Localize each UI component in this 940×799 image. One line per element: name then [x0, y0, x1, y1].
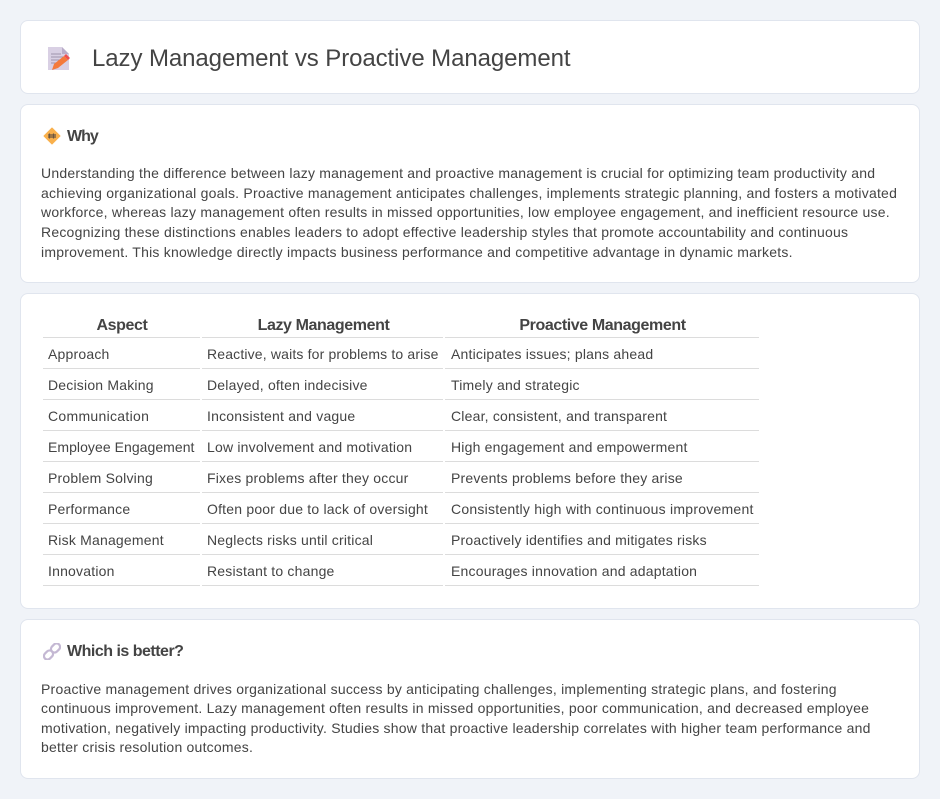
icon: warning diamond: [44, 128, 60, 144]
row: approach: Approach: [48, 346, 110, 362]
icon: link: [43, 643, 61, 660]
text block: why paragraph: Recognizing these distinctions enables leaders to adopt effective leadership styles that promote accountability and continuous: [41, 224, 848, 240]
row: risk management: Proactively identifies and mitigates risks: [451, 532, 707, 548]
panel: why: [20, 104, 920, 283]
text block: why paragraph: workforce, whereas lazy management often results in missed opportunities, low employee engagement, and inefficient resource use.: [41, 204, 890, 220]
heading: which is better: Which is better?: [67, 643, 183, 660]
icon: memo with pencil: [48, 47, 70, 70]
row: performance: Consistently high with continuous improvement: [451, 501, 754, 517]
heading: why: Why: [67, 128, 98, 145]
row: performance: [48, 501, 754, 517]
row: problem solving: Fixes problems after they occur: [207, 470, 408, 486]
row: communication: [48, 408, 667, 424]
row: approach: Reactive, waits for problems to arise: [207, 346, 439, 362]
text block: why paragraph: improvement. This knowledge directly impacts business performance and competitive advantage in dynamic markets.: [41, 244, 793, 260]
row: employee engagement: [48, 439, 688, 455]
table header: [96, 317, 686, 334]
row: problem solving: Problem Solving: [48, 470, 153, 486]
row: risk management: Neglects risks until critical: [207, 532, 373, 548]
panel: comparison table: [20, 293, 920, 609]
text block: why paragraph: Understanding the difference between lazy management and proactive management is crucial for optimizing team productivity and: [41, 165, 875, 181]
text block: which is better paragraph: better crisis resolution outcomes.: [41, 739, 253, 755]
row: approach: [48, 346, 653, 362]
row: problem solving: Prevents problems before they arise: [451, 470, 683, 486]
row: performance: Performance: [48, 501, 130, 517]
text block: why paragraph: [41, 165, 897, 260]
text block: which is better paragraph: [41, 681, 871, 755]
row: decision making: Timely and strategic: [451, 377, 580, 393]
row: communication: Clear, consistent, and transparent: [451, 408, 667, 424]
table header: Lazy Management: [258, 317, 389, 334]
row: innovation: Innovation: [48, 563, 115, 579]
row: employee engagement: Low involvement and motivation: [207, 439, 412, 455]
text block: which is better paragraph: continuous improvement. Lazy management often results in missed opportunities, poor communication, and decreased employee: [41, 700, 869, 716]
panel: which is better: [20, 619, 920, 779]
row: performance: Often poor due to lack of oversight: [207, 501, 428, 517]
row: innovation: Encourages innovation and adaptation: [451, 563, 697, 579]
row: communication: Inconsistent and vague: [207, 408, 355, 424]
text block: why paragraph: achieving organizational goals. Proactive management anticipates challenges, implements strategic planning, and fosters a motivated: [41, 185, 897, 201]
row: employee engagement: Employee Engagement: [48, 439, 194, 455]
row: approach: Anticipates issues; plans ahead: [451, 346, 653, 362]
title: Lazy Management vs Proactive Management: [92, 45, 570, 72]
row: communication: Communication: [48, 408, 149, 424]
row: problem solving: [48, 470, 683, 486]
row: risk management: Risk Management: [48, 532, 164, 548]
row: decision making: [48, 377, 580, 393]
row: employee engagement: High engagement and empowerment: [451, 439, 688, 455]
text block: which is better paragraph: Proactive management drives organizational success by anticipating challenges, implementing strategic plans, and fostering: [41, 681, 837, 697]
row: innovation: [48, 563, 697, 579]
table header: Proactive Management: [519, 317, 686, 334]
panel: header: [20, 20, 920, 94]
row: innovation: Resistant to change: [207, 563, 335, 579]
row: risk management: [48, 532, 707, 548]
row: decision making: Delayed, often indecisive: [207, 377, 368, 393]
row: decision making: Decision Making: [48, 377, 154, 393]
text block: which is better paragraph: motivation, negatively impacting productivity. Studies show that proactive leadership correlates with higher team performance and: [41, 720, 871, 736]
table header: Aspect: [97, 317, 147, 334]
